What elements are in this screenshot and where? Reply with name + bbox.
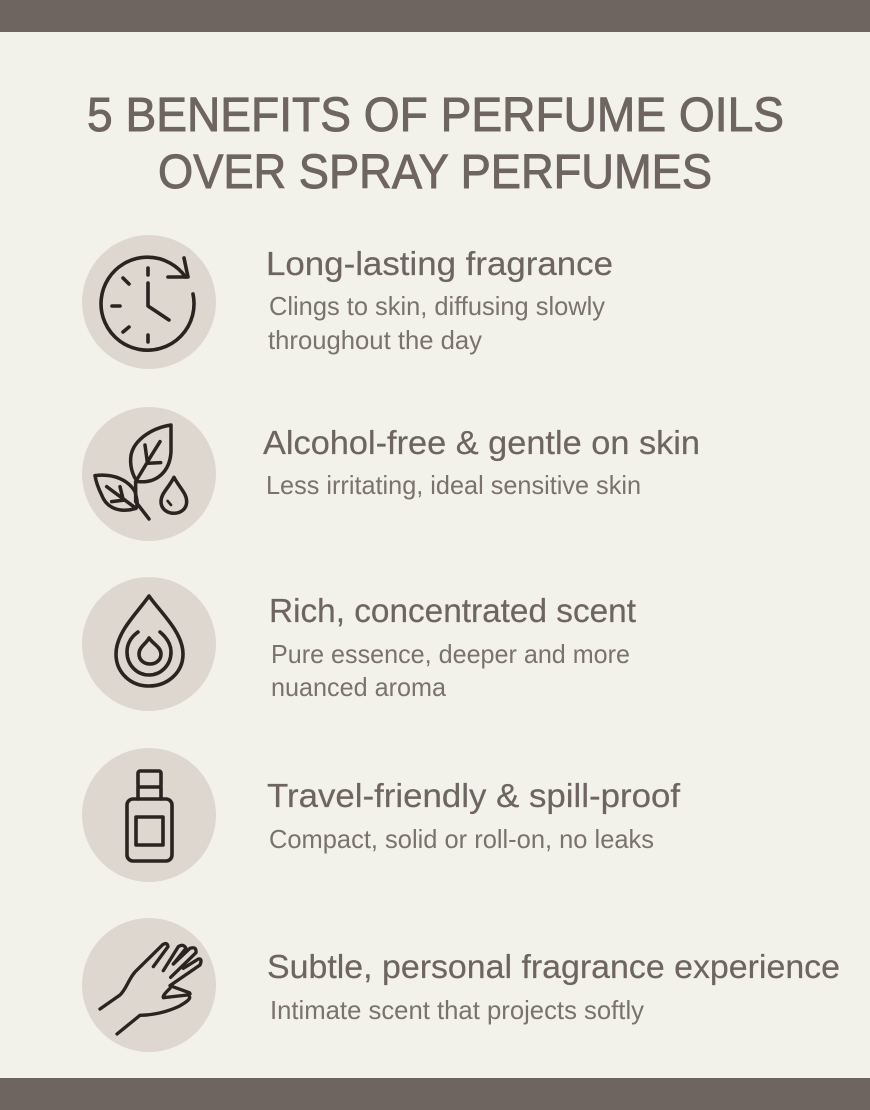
benefit 4: travel-friendly [82, 748, 681, 882]
heading: rich scent: Rich, concentrated scent [269, 592, 636, 629]
description: long-lasting fragrance: Clings to skin, diffusing slowly [269, 291, 605, 321]
description: long-lasting fragrance: throughout the day [268, 325, 482, 355]
description: rich scent [271, 639, 630, 702]
heading: subtle: Subtle, personal fragrance experience [267, 948, 840, 985]
description: rich scent: nuanced aroma [271, 672, 447, 702]
icon: hand [82, 918, 216, 1052]
description: travel-friendly: Compact, solid or roll-on, no leaks [269, 824, 654, 854]
top bar [0, 0, 870, 32]
icon: bottle [82, 748, 216, 882]
title [87, 89, 784, 199]
heading: travel-friendly: Travel-friendly & spill-proof [267, 777, 681, 814]
bottom bar [0, 1078, 870, 1110]
title: OVER SPRAY PERFUMES [158, 146, 712, 199]
benefit 3: rich scent [82, 577, 636, 711]
icon: leaves and droplet [82, 407, 216, 541]
heading: long-lasting fragrance: Long-lasting fragrance [266, 245, 613, 282]
benefit 1: long-lasting fragrance [82, 235, 613, 369]
description: rich scent: Pure essence, deeper and more [271, 639, 630, 669]
heading: alcohol-free: Alcohol-free & gentle on skin [263, 424, 700, 461]
benefit 2: alcohol-free [82, 407, 700, 541]
icon: clock with arrow [82, 235, 216, 369]
icon: concentric drop [82, 577, 216, 711]
description: long-lasting fragrance [268, 291, 605, 355]
benefit 5: subtle [82, 918, 840, 1052]
title: 5 BENEFITS OF PERFUME OILS [87, 89, 784, 142]
description: subtle: Intimate scent that projects softly [270, 995, 644, 1025]
description: alcohol-free: Less irritating, ideal sensitive skin [266, 470, 641, 500]
